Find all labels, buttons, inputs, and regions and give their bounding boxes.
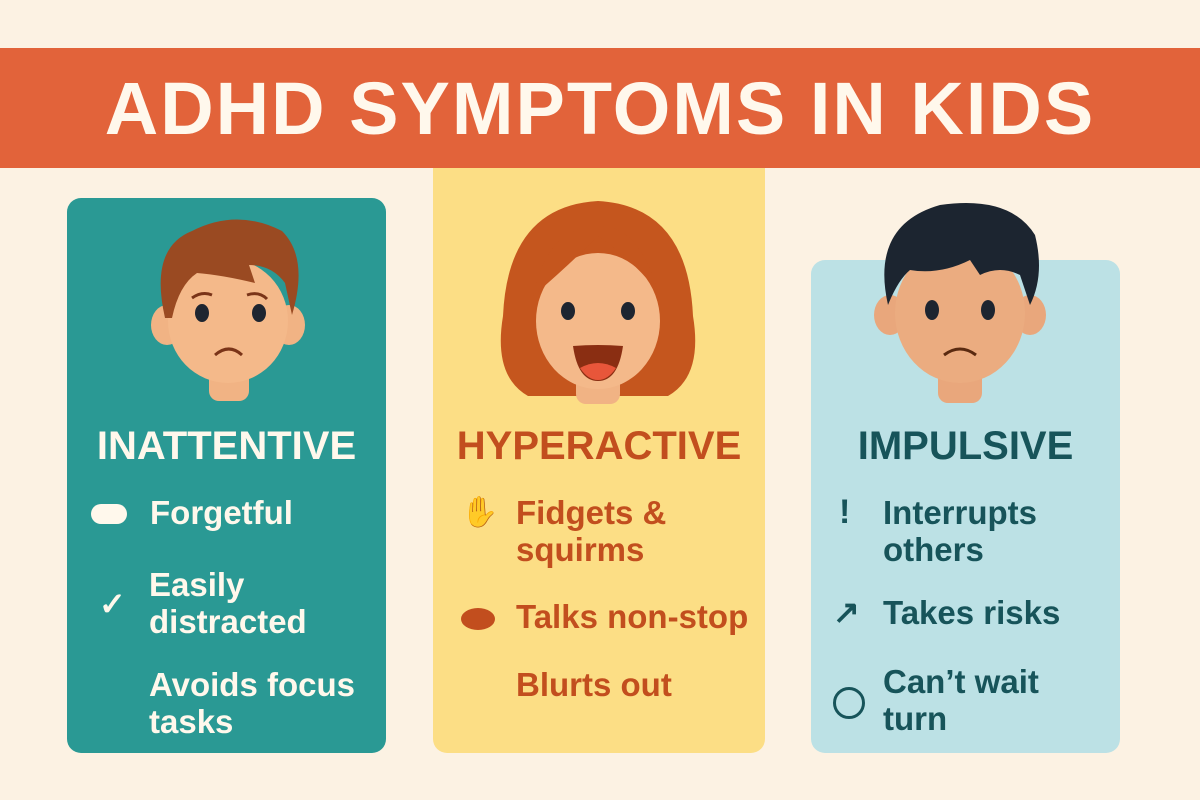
icon: girl face [500, 201, 696, 404]
item: forgetful: Forgetful [150, 494, 293, 531]
panel: inattentive [67, 198, 386, 753]
item: can't wait turn: Can’t wait [883, 663, 1039, 700]
item: can't wait turn [833, 663, 1039, 737]
item: fidgets [461, 494, 666, 568]
item: easily distracted [99, 566, 307, 640]
heading: hyperactive: HYPERACTIVE [457, 424, 741, 468]
item: takes risks: Takes risks [883, 594, 1060, 631]
item: easily distracted: Easily [149, 566, 244, 603]
heading: impulsive: IMPULSIVE [858, 424, 1073, 468]
item: interrupts: ! [839, 493, 850, 531]
item: avoids focus tasks [149, 666, 355, 740]
item: blurts out: Blurts out [516, 666, 672, 703]
item: can't wait turn: turn [883, 700, 947, 737]
item: easily distracted: distracted [149, 603, 307, 640]
item: avoids focus tasks: tasks [149, 703, 233, 740]
item: talks non-stop: Talks non-stop [516, 598, 748, 635]
icon: dark-haired boy face [874, 203, 1046, 403]
heading: inattentive: INATTENTIVE [97, 424, 356, 468]
item: fidgets: squirms [516, 531, 644, 568]
item: avoids focus tasks: Avoids focus [149, 666, 355, 703]
item: interrupts [839, 493, 1037, 568]
item: easily distracted: ✓ [99, 586, 126, 622]
title banner [0, 48, 1200, 168]
item: takes risks: ↗ [833, 594, 860, 630]
item: fidgets: ✋ [461, 496, 498, 529]
item: fidgets: Fidgets & [516, 494, 666, 531]
title: ADHD SYMPTOMS IN KIDS [105, 67, 1095, 150]
icon: boy face [151, 220, 305, 401]
panel: impulsive [811, 260, 1120, 753]
item: interrupts: Interrupts [883, 494, 1037, 531]
item: interrupts: others [883, 531, 984, 568]
panel: hyperactive [433, 168, 765, 753]
